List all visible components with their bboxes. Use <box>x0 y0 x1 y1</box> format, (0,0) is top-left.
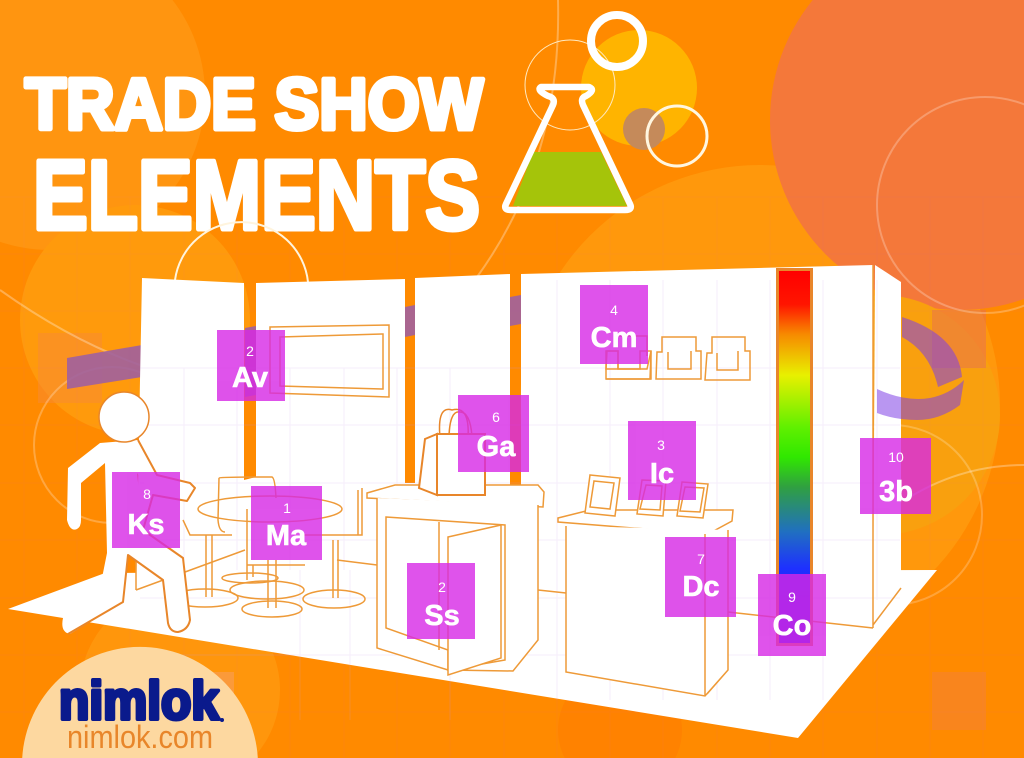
element labels: 8 <box>143 486 151 502</box>
person <box>62 392 195 634</box>
element labels: Av <box>232 362 268 394</box>
element labels: Ks <box>127 509 165 541</box>
title <box>25 65 483 250</box>
arc above booth <box>175 222 308 282</box>
title: TRADE SHOW <box>25 65 483 145</box>
element labels: Cm <box>591 322 637 354</box>
element labels: Ma <box>266 520 307 552</box>
shopping bag <box>419 409 485 495</box>
title: ELEMENTS <box>33 140 480 250</box>
flask with bubbles <box>505 15 707 210</box>
element labels: 6 <box>492 409 500 425</box>
element labels: Ga <box>477 431 516 463</box>
element labels: Co <box>773 610 811 642</box>
floor <box>8 570 937 738</box>
booth walls <box>136 265 901 628</box>
element labels: Dc <box>682 571 720 603</box>
brochure holders <box>606 336 750 380</box>
logo badge: nimlok <box>59 671 220 731</box>
element labels: 2 <box>438 579 446 595</box>
desk with frames <box>558 475 733 696</box>
colour column <box>776 268 813 646</box>
ribbon right <box>877 317 964 420</box>
element labels: 10 <box>888 449 904 465</box>
purple ribbon left <box>67 295 521 397</box>
element labels: 3 <box>657 437 665 453</box>
counter with doors <box>367 485 544 675</box>
element tiles <box>112 285 931 656</box>
grid over booth <box>140 280 900 720</box>
element labels: Ss <box>424 600 460 632</box>
table and chairs <box>172 477 365 617</box>
element labels: 1 <box>283 500 291 516</box>
screen frame <box>270 325 389 397</box>
logo badge <box>22 647 258 758</box>
element labels: 9 <box>788 589 796 605</box>
element labels <box>127 302 913 642</box>
wall outlines <box>136 265 901 628</box>
element labels: 2 <box>246 343 254 359</box>
element labels: 7 <box>697 551 705 567</box>
element labels: Ic <box>650 458 674 490</box>
logo badge: nimlok.com <box>67 719 213 755</box>
element labels: 3b <box>879 476 913 508</box>
element labels: 4 <box>610 302 618 318</box>
